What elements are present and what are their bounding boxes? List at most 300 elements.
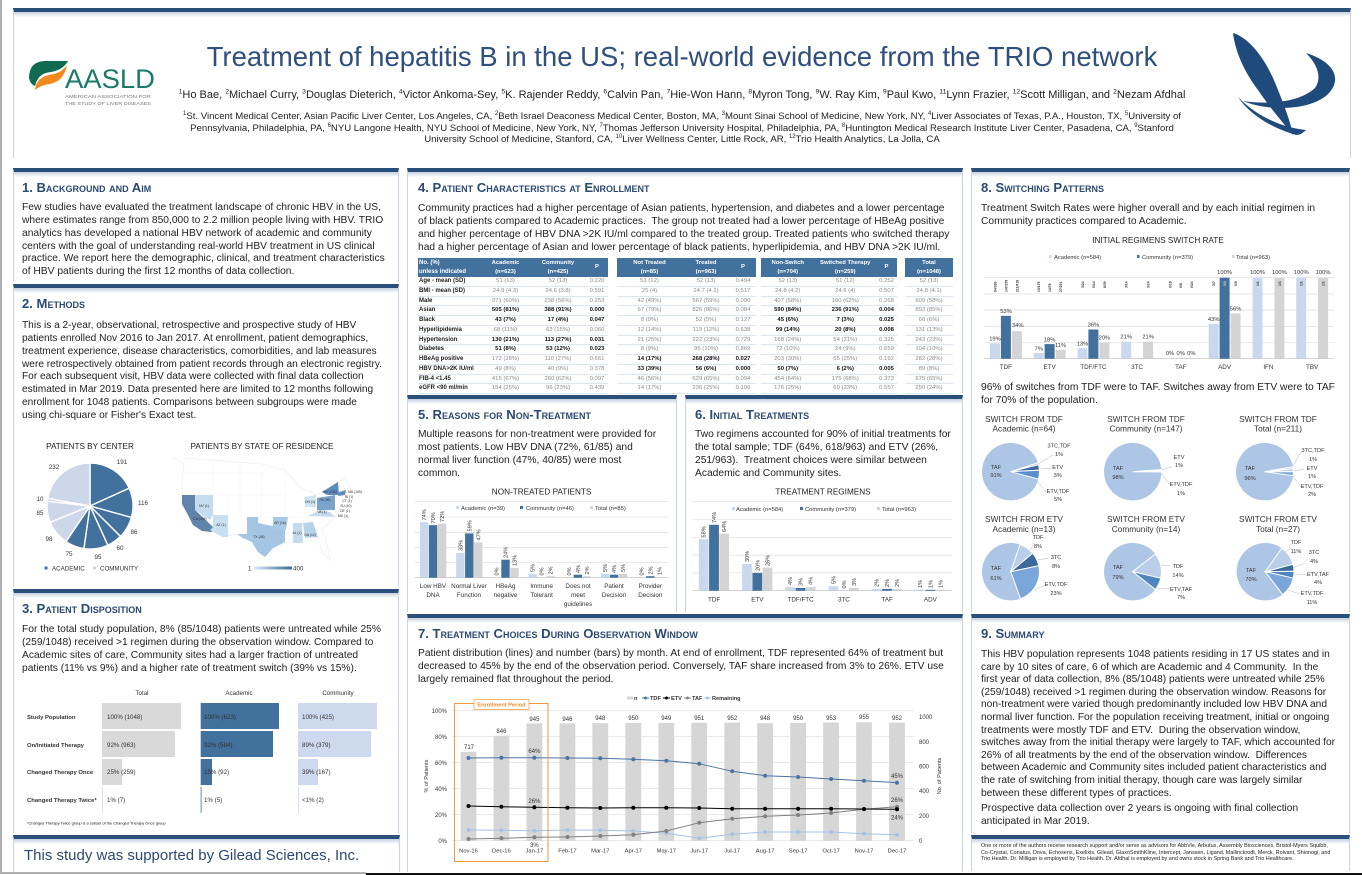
text block: prospective data [981, 803, 1298, 827]
text block: For the total study population, 8% (85/1048) patients were untreated while 25% [22, 624, 381, 635]
bar chart: initial regimens switch rate: INITIAL REGIMENS SWITCH RATE [1092, 236, 1224, 245]
pie charts: switch from TDF and ETV: 14% [1172, 573, 1184, 579]
pie charts: switch from TDF and ETV: 4% [1314, 580, 1322, 586]
bar chart: non-treated patients: 24% [504, 547, 510, 558]
combo chart: treatment by month: % of Patients [424, 759, 430, 792]
pie charts: switch from TDF and ETV: ETV,TDF [1301, 484, 1324, 490]
table: patient characteristics: 56 (6%) [696, 366, 716, 372]
table: patient characteristics: Male [419, 298, 432, 304]
text block [22, 202, 385, 277]
table: patient characteristics: 60 (6%) [919, 317, 939, 323]
table: patient characteristics: 113 (27%) [545, 337, 571, 343]
bar chart: treatment regimens: 4% [788, 577, 794, 585]
bar chart: initial regimens switch rate: 20% [1099, 336, 1110, 342]
pie charts: switch from TDF and ETV: ETV,TDF [1301, 591, 1324, 597]
combo chart: treatment by month: ETV [671, 696, 682, 702]
bar chart: non-treated patients: 5% [531, 564, 537, 572]
combo chart: treatment by month: Remaining [712, 696, 741, 702]
pie charts: switch from TDF and ETV: ETV,TDF [1045, 582, 1068, 588]
map: patients by state of residence [172, 442, 362, 572]
table: patient characteristics: 21 (25%) [638, 337, 661, 343]
funnel bar chart: On/Initiated Therapy [27, 743, 85, 749]
table: patient characteristics: 0.097 [590, 376, 604, 382]
bar chart: treatment regimens: ADV [924, 596, 938, 604]
table: patient characteristics: 65 (25%) [833, 356, 857, 362]
table: patient characteristics: 72 (10%) [776, 346, 800, 352]
text block: Two regimens accounted for 90% of initial treatments for [695, 429, 951, 440]
table: patient characteristics: Asian [419, 307, 435, 313]
map: patients by state of residence: NV (1) [199, 504, 209, 508]
combo chart: treatment by month: Sep-17 [789, 848, 807, 854]
combo chart: treatment by month: 946 [562, 717, 573, 723]
table: patient characteristics: (n=425) [548, 268, 568, 274]
map: patients by state of residence: 400 [293, 566, 304, 572]
text block: centers with the goal of understanding real-world HBV treatment in US clinical [22, 241, 375, 252]
funnel bar chart: 39% (167) [302, 769, 331, 776]
bar chart: treatment regimens: TREATMENT REGIMENS [775, 488, 871, 496]
combo chart: treatment by month: Nov-17 [855, 848, 873, 854]
table: patient characteristics [418, 258, 953, 394]
pie chart: patients by center [36, 442, 149, 572]
pie charts: switch from TDF and ETV: 23% [1050, 591, 1062, 597]
map: patients by state of residence: OH (1) [305, 500, 315, 504]
bar chart: initial regimens switch rate: 3/24 [1081, 281, 1085, 288]
text block [418, 203, 950, 253]
table: patient characteristics: 40 (9%) [548, 366, 568, 372]
text block: practice. We report here the demographic, clinical, and treatment characteristics [22, 253, 385, 264]
table: patient characteristics: 0.000 [590, 307, 604, 313]
table: patient characteristics: 52 (5%) [696, 317, 716, 323]
pie chart: patients by center: 60 [116, 545, 124, 552]
bar chart: initial regimens switch rate: 0% [1187, 351, 1195, 357]
pie charts: switch from TDF and ETV: 8% [1052, 564, 1060, 570]
bar chart: initial regimens switch rate: 100% [1294, 270, 1309, 276]
text block [981, 649, 1335, 799]
pie chart: patients by center: ACADEMIC [52, 566, 85, 572]
pie charts: switch from TDF and ETV: 3% [1054, 473, 1062, 479]
bar chart: initial regimens switch rate: 56% [1230, 306, 1241, 312]
bar chart: initial regimens switch rate: 0/24 [1190, 281, 1194, 288]
combo chart: treatment by month: No. of Patients [937, 757, 943, 794]
table: patient characteristics: 0.004 [879, 307, 894, 313]
bar chart: initial regimens switch rate: 21% [1142, 335, 1154, 341]
pie charts: switch from TDF and ETV: 91% [990, 473, 1002, 479]
bar chart: non-treated patients: Function [457, 592, 482, 599]
bar chart: treatment regimens: TDF/FTC [787, 596, 814, 604]
pie charts: switch from TDF and ETV: TAF [991, 465, 1002, 471]
bar chart: non-treated patients: Immune [530, 583, 554, 590]
table: patient characteristics: 371 (60%) [492, 298, 519, 304]
table: patient characteristics: 24.8 (4.2) [775, 288, 800, 294]
text block: normal liver function (47%, 40/85) were most [418, 455, 621, 466]
combo chart: treatment by month: 200 [919, 814, 930, 820]
bar chart: treatment regimens: 0% [842, 580, 848, 588]
text block: This is a 2-year, observational, retrospective and prospective study of HBV [22, 320, 356, 331]
bar chart: initial regimens switch rate: 147/279 [1004, 280, 1008, 292]
pie chart: patients by center: 85 [36, 510, 44, 517]
bar chart: non-treated patients: 0% [494, 567, 500, 576]
text block: switch destinations: for 70% of the population. [981, 395, 1098, 406]
bar chart: initial regimens switch rate: ADV [1218, 364, 1232, 371]
bar chart: initial regimens switch rate: TDF [1000, 364, 1012, 371]
pie charts: switch from TDF and ETV: 8% [1034, 544, 1042, 550]
bar chart: treatment regimens: TAF [881, 596, 893, 604]
pie charts: switch from TDF and ETV: TAF [991, 566, 1002, 572]
table: patient characteristics: 8 (9%) [641, 346, 658, 352]
bar chart: treatment regimens: Community (n=379) [805, 507, 856, 513]
pie charts: switch from TDF and ETV: 98% [1112, 475, 1124, 481]
pie charts: switch from TDF and ETV: ETV,TDF [1170, 482, 1193, 488]
pie charts: switch from TDF and ETV: 79% [1112, 575, 1124, 581]
bar chart: non-treated patients: Decision [602, 592, 627, 599]
bar chart: non-treated patients: 33% [458, 540, 464, 551]
combo chart: treatment by month: n [634, 696, 638, 702]
table: patient characteristics: 250 (24%) [915, 385, 943, 391]
bar chart: non-treated patients: HBeAg [496, 583, 516, 590]
pie charts: switch from TDF and ETV: TDF [1033, 535, 1044, 541]
bar chart: initial regimens switch rate: TAF [1175, 364, 1187, 371]
heading: 7. Treatment Choices During Observation Window [418, 626, 698, 641]
combo chart: treatment by month: 952 [727, 716, 738, 722]
table: patient characteristics: (n=1048) [917, 268, 941, 274]
combo chart: treatment by month: 952 [892, 716, 903, 722]
bar chart: non-treated patients: 4% [612, 565, 618, 573]
combo chart: treatment by month: Aug-17 [756, 848, 774, 854]
heading: 8. Switching Patterns [981, 180, 1104, 195]
bar chart: initial regimens switch rate: 0/16 [1168, 281, 1172, 288]
map: patients by state of residence: CA (498) [193, 517, 207, 521]
bar chart: non-treated patients: Patient [604, 583, 624, 590]
funnel bar chart: Changed Therapy Twice* [27, 798, 97, 804]
table: patient characteristics: 0.591 [590, 288, 604, 294]
bar chart: initial regimens switch rate: 5/9 [1234, 281, 1238, 286]
text block: patients (11% vs 9%) and a higher rate of treatment switch (39% vs 15%). [22, 663, 357, 674]
text block: between these different types of practices. [981, 788, 1172, 799]
heading: 5. Reasons for Non-Treatment [418, 407, 591, 422]
map: patients by state of residence: TX (48) [253, 535, 265, 539]
table: patient characteristics: 50 (7%) [777, 366, 798, 372]
funnel bar chart: 89% (379) [302, 742, 331, 749]
map: patients by state of residence: AL (1) [292, 531, 302, 535]
table: patient characteristics: 243 (23%) [915, 337, 943, 343]
table: patient characteristics: 43 (7%) [495, 317, 516, 323]
text block: were retrospectively obtained from patient records through an electronic registry. [22, 359, 382, 370]
table: patient characteristics: (n=623) [495, 268, 516, 274]
pie charts: switch from TDF and ETV: SWITCH FROM TDF [1239, 414, 1317, 424]
table: patient characteristics: 51 (13) [496, 278, 515, 284]
text block: This HBV population represents 1048 patients residing in 17 US states and in [981, 649, 1330, 660]
bar chart: treatment regimens: 3% [798, 578, 804, 586]
text block [418, 648, 944, 685]
text block: largely remained flat throughout the period. [418, 674, 613, 685]
pie charts: switch from TDF and ETV: TDF [1173, 564, 1184, 570]
disclosure text [981, 843, 1330, 862]
bar chart: initial regimens switch rate: Community (n=379) [1142, 255, 1193, 261]
text block: first year of data collection, 8% (85/1048) patients were untreated while 25% [981, 674, 1325, 685]
table: patient characteristics: 0.023 [590, 346, 604, 352]
logo: AASLD: AASLD [65, 64, 155, 94]
table: patient characteristics: 46 (56%) [638, 376, 661, 382]
pie charts: switch from TDF and ETV: ETV [1052, 465, 1063, 471]
bar chart: initial regimens switch rate: 0% [1177, 351, 1185, 357]
pie charts: switch from TDF and ETV: TAF [1113, 565, 1124, 571]
bar chart: treatment regimens: 1% [918, 580, 924, 588]
bar chart: initial regimens switch rate: 14/76 [1048, 283, 1052, 292]
table: patient characteristics: 0.507 [879, 288, 894, 294]
bar chart: treatment regimens: 5% [832, 576, 838, 584]
bar chart: non-treated patients: Tolerant [530, 592, 553, 599]
table: patient characteristics: 0.557 [879, 385, 894, 391]
pie chart: patients by center: 86 [130, 529, 138, 536]
map: patients by state of residence: 1 [248, 566, 252, 572]
pie charts: switch from TDF and ETV: 96% [1244, 476, 1256, 482]
bar chart: non-treated patients: 70% [431, 512, 437, 524]
table: patient characteristics: (n=704) [777, 268, 798, 274]
bar chart: initial regimens switch rate: 18% [1044, 338, 1055, 344]
pie chart: patients by center: 98 [45, 536, 53, 543]
table: patient characteristics: 51 (8%) [495, 346, 516, 352]
bar chart: non-treated patients: Academic (n=39) [461, 506, 505, 512]
combo chart: treatment by month: 40% [435, 787, 448, 793]
table: patient characteristics: 236 (91%) [832, 307, 859, 313]
bar chart: initial regimens switch rate: 11% [1055, 343, 1066, 349]
table: patient characteristics: 0.000 [736, 366, 750, 372]
bar chart: treatment regimens: 74% [712, 512, 718, 523]
table: patient characteristics: 893 (85%) [915, 307, 943, 313]
panel: summary [971, 614, 1350, 833]
table: patient characteristics: BMI - mean (SD) [419, 288, 465, 294]
funnel bar chart: 100% (623) [204, 714, 236, 721]
pie charts: switch from TDF and ETV: 3TC,TDF [1048, 444, 1071, 450]
table: patient characteristics: 119 (12%) [693, 327, 719, 333]
funnel bar chart: 92% (584) [204, 742, 233, 749]
table: patient characteristics: 130 (21%) [492, 337, 519, 343]
funding text: This study was supported by Gilead Sciences, Inc. [24, 847, 359, 864]
text block: patients enrolled Nov 2016 to Jan 2017. At enrollment, patient demographics, [22, 333, 368, 344]
pie charts: switch from TDF and ETV: Community (n=14) [1112, 524, 1180, 534]
bar chart: treatment regimens: Academic (n=584) [736, 507, 783, 513]
header panel [13, 8, 1351, 158]
combo chart: treatment by month: 60% [435, 761, 448, 767]
combo chart: treatment by month: 0% [438, 839, 448, 845]
text block: of HBV patients during the first 12 months of data collection. [22, 266, 294, 277]
table: patient characteristics: 0.127 [736, 317, 750, 323]
panel: disclosures [971, 835, 1350, 871]
bar chart: initial regimens switch rate: 19% [989, 336, 1001, 342]
table: patient characteristics: 154 (25%) [492, 385, 519, 391]
funnel bar chart: Total [135, 690, 149, 697]
combo chart: treatment by month: 717 [464, 745, 475, 751]
table: patient characteristics: 17 (4%) [548, 317, 568, 323]
table: patient characteristics: 14 (17%) [638, 385, 661, 391]
bar chart: non-treated patients: 47% [476, 529, 482, 540]
pie charts: switch from TDF and ETV: ETV,TAF [1307, 572, 1330, 578]
pie charts: switch from TDF and ETV: 1% [1309, 457, 1317, 463]
bar chart: initial regimens switch rate: 53% [1000, 309, 1012, 315]
bar chart: non-treated patients: 2% [549, 566, 555, 574]
pie charts: switch from TDF and ETV: 70% [1245, 577, 1257, 583]
text block: most patients. Low HBV DNA (72%, 61/85) and [418, 442, 633, 453]
bar chart: initial regimens switch rate: Academic (n=584) [1054, 255, 1101, 261]
pie chart: patients by center: PATIENTS BY CENTER [46, 442, 134, 451]
pie charts: switch from TDF and ETV: 1% [1308, 474, 1316, 480]
bar chart: initial regimens switch rate: 3/7 [1212, 281, 1216, 286]
table: patient characteristics: 33 (39%) [638, 366, 661, 372]
affiliations: 1St. Vincent Medical Center, Asian Pacific Liver Center, Los Angeles, CA, 2Beth Israel Deaconess Medical Center, Boston, MA, 3Mount Sinai School of Medicine, New York, NY, 4Liver Associates of Texas, P.A., Houston, TX, 5University of [183, 111, 1181, 122]
table: patient characteristics: 0.439 [590, 385, 604, 391]
table: patient characteristics: 282 (28%) [915, 356, 943, 362]
pie chart: patients by center: 10 [36, 496, 44, 503]
bar chart: initial regimens switch rate: 1/1 [1322, 281, 1326, 286]
table: patient characteristics: 0.325 [879, 337, 894, 343]
table: patient characteristics: 110 (27%) [545, 356, 571, 362]
table: patient characteristics: 268 (28%) [692, 356, 720, 362]
table: patient characteristics: Total [922, 260, 936, 266]
bar chart: initial regimens switch rate: 3/14 [1147, 281, 1151, 288]
combo chart: treatment by month: Mar-17 [591, 848, 609, 854]
combo chart: treatment by month: Enrollment Period [477, 703, 526, 709]
table: patient characteristics: 8 (9%) [641, 317, 658, 323]
heading: 3. Patient Disposition [22, 601, 142, 616]
text block: Community practices had a higher percentage of Asian patients, hypertension, and diabetes and a lower percentage [418, 203, 944, 214]
pie chart: patients by center: 75 [65, 551, 73, 558]
bar chart: initial regimens switch rate: IFN [1263, 364, 1274, 371]
text block [22, 624, 381, 674]
pie chart: patients by center: 232 [49, 464, 60, 471]
pie charts: switch from TDF and ETV: 3TC [1309, 550, 1319, 556]
text block: non-treatment were varied though predominantly included low HBV DNA and [981, 699, 1327, 710]
map: patients by state of residence: NJ (40) [340, 504, 352, 508]
table: patient characteristics: 0.638 [736, 327, 750, 333]
table: patient characteristics: 260 (62%) [544, 376, 572, 382]
map: patients by state of residence: NY (236) [323, 490, 337, 494]
bar chart: treatment regimens: 2% [895, 579, 901, 587]
text block: enrollment for 1048 patients. Comparisons between subgroups were made [22, 397, 357, 408]
combo chart: treatment by month: 846 [496, 729, 507, 735]
pie charts: switch from TDF and ETV: TDF [1291, 540, 1302, 546]
table: patient characteristics: Switched Therapy [820, 260, 870, 266]
map: patients by state of residence: CT (1) [342, 499, 352, 503]
table: patient characteristics: 60 (23%) [833, 385, 857, 391]
text block: care by 10 sites of care, 6 of which are Academic and 4 Community. In the [981, 662, 1318, 673]
table: patient characteristics: eGFR <90 ml/min [419, 385, 468, 391]
map: patients by state of residence: PA (36) [319, 498, 331, 502]
heading: 9. Summary [981, 626, 1044, 641]
funnel bar chart: Community [322, 690, 355, 697]
combo chart: treatment by month: Dec-16 [492, 848, 511, 854]
funnel bar chart: 1% (7) [107, 797, 125, 804]
combo chart: treatment by month [424, 696, 943, 862]
bar chart: non-treated patients: negative [494, 592, 518, 599]
panel: initial treatments [685, 395, 963, 612]
combo chart: treatment by month: 45% [891, 774, 904, 780]
text block: Multiple reasons for non-treatment were provided for [418, 429, 656, 440]
table: patient characteristics: 160 (62%) [832, 298, 859, 304]
bar chart: non-treated patients: 0% [639, 567, 645, 576]
heading: 2. Methods [22, 296, 85, 311]
text block: estimated in Mar 2019. Data presented here are limited to 12 months following [22, 384, 373, 395]
table: patient characteristics: HBV DNA>2K IU/ml [419, 366, 474, 372]
table: patient characteristics: 0.094 [736, 376, 750, 382]
text block: treatments were mostly TDF and ETV. During the observation window, [981, 725, 1300, 736]
bar chart: non-treated patients: 0% [567, 567, 573, 576]
pie chart: patients by center: 191 [117, 459, 128, 466]
table: patient characteristics: 45 (6%) [777, 317, 798, 323]
combo chart: treatment by month: 3% [530, 843, 539, 849]
bar chart: initial regimens switch rate: 3/14 [1125, 281, 1129, 288]
text block [22, 320, 382, 421]
table: patient characteristics: 203 (30%) [774, 356, 801, 362]
bar chart: initial regimens switch rate: 100% [1217, 270, 1232, 276]
bar chart: initial regimens switch rate: 13% [1077, 342, 1088, 348]
table: patient characteristics: 53 (12%) [546, 346, 570, 352]
pie charts: switch from TDF and ETV: ETV,TAF [1170, 587, 1193, 593]
table: patient characteristics: 175 (68%) [832, 376, 859, 382]
table: patient characteristics: 0.517 [736, 288, 750, 294]
table: patient characteristics: (n=963) [696, 268, 716, 274]
combo chart: treatment by month: 600 [919, 764, 930, 770]
combo chart: treatment by month: TDF [650, 696, 661, 702]
table: patient characteristics: 24.6 (3.8) [545, 288, 571, 294]
table: patient characteristics: 67 (79%) [638, 307, 661, 313]
text block: the rate of switching from initial therapy, though care was largely similar [981, 775, 1302, 786]
table: patient characteristics: P [595, 264, 599, 270]
bar chart: initial regimens switch rate: 1/1 [1278, 281, 1282, 286]
table: patient characteristics: 609 (58%) [915, 298, 943, 304]
table: patient characteristics: 0.090 [736, 298, 750, 304]
table: patient characteristics: (n=85) [641, 268, 658, 274]
pie charts: switch from TDF and ETV: 11% [1291, 549, 1301, 555]
table: patient characteristics: 131 (13%) [915, 327, 943, 333]
table: patient characteristics: 104 (10%) [915, 346, 943, 352]
pie charts: switch from TDF and ETV: Academic (n=64) [993, 424, 1056, 434]
table: patient characteristics: 68 (11%) [494, 327, 517, 333]
table: patient characteristics: Non-Switch [772, 260, 804, 266]
bar chart: treatment regimens: 20% [755, 560, 761, 571]
bar chart: treatment regimens: 3% [852, 578, 858, 586]
combo chart: treatment by month: 1000 [919, 715, 933, 721]
table: patient characteristics: 0.106 [736, 385, 750, 391]
table: patient characteristics: 0.084 [736, 307, 750, 313]
bar chart: non-treated patients: 2% [585, 566, 591, 574]
text block: 251/963). Treatment choices were similar between [695, 455, 927, 466]
map: patients by state of residence: GA (12) [304, 533, 316, 537]
combo chart: treatment by month: TAF [692, 696, 703, 702]
bar chart: non-treated patients: Decision [638, 592, 663, 599]
table: patient characteristics: FIB-4 <1.45 [419, 376, 451, 382]
bar chart: non-treated patients: 4% [576, 565, 582, 573]
table: patient characteristics: 0.268 [879, 298, 894, 304]
table: patient characteristics: 0.008 [879, 327, 894, 333]
text block: had a higher percentage of Asian and lower percentage of black patients, hyperlipidemia, and HBV DNA >2K IU/ml. [418, 242, 940, 253]
table: patient characteristics: 24.6 (4) [835, 288, 855, 294]
table: patient characteristics: 63 (15%) [546, 327, 570, 333]
text block [418, 429, 656, 479]
bar chart: non-treated patients: Provider [639, 583, 662, 590]
table: patient characteristics: Diabetes [419, 346, 444, 352]
panel: switching patterns [971, 168, 1350, 612]
disclosure text: Trio Health. Dr. Milligan is employed by Trio Health. Dr. Afdhal is employed by and owns stock in Spring Bank and Trio Healthcare. [981, 856, 1294, 862]
bar chart: non-treated patients: Low HBV [420, 583, 447, 590]
table: patient characteristics: HBeAg positive [419, 356, 463, 362]
funnel bar chart: <1% (2) [302, 797, 324, 804]
combo chart: treatment by month: 24% [891, 816, 904, 822]
combo chart: treatment by month: 953 [826, 716, 837, 722]
text block: switch destinations [981, 382, 1335, 406]
bar chart: initial regimens switch rate: 211/618 [1015, 280, 1019, 292]
logo: AASLD [29, 61, 155, 106]
table: patient characteristics: 0.220 [590, 278, 604, 284]
